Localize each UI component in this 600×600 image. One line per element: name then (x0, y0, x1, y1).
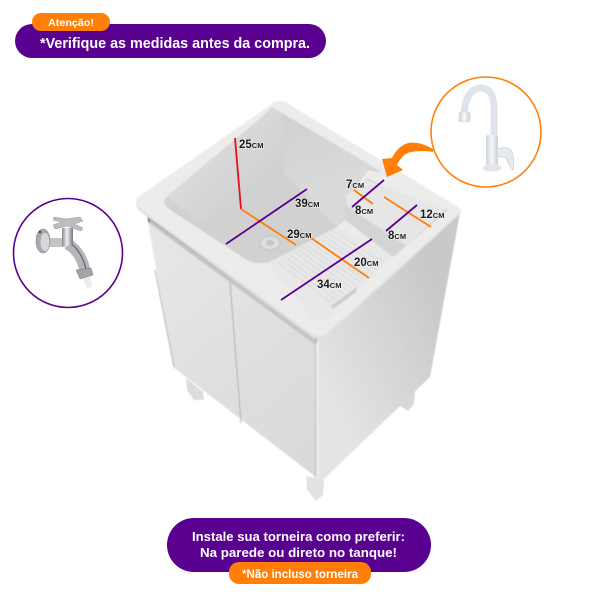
measurement labels: 8CM (388, 230, 406, 242)
tank rim lip (136, 198, 461, 339)
icon: chrome faucet (36, 217, 93, 288)
tank rim (136, 101, 460, 336)
badge: faucet not included: *Não incluso torneira (242, 569, 359, 581)
drain (260, 236, 280, 250)
circle: wall-mounted faucet (14, 198, 122, 308)
badge: faucet not included (229, 562, 371, 584)
line 39cm (226, 189, 307, 244)
measurement labels: 25CM (239, 139, 263, 151)
badge: Atenção: Atenção! (48, 17, 94, 29)
measurement labels: 8CM (355, 205, 373, 217)
back legs (186, 378, 415, 411)
soap dish (345, 178, 448, 257)
measurement labels: 39CM (295, 198, 319, 210)
circle: tank-mounted faucet (431, 77, 541, 187)
measurement labels: 29CM (287, 229, 311, 241)
line 7cm (354, 190, 373, 204)
line 34cm (281, 239, 372, 300)
measurement labels: 7CM (346, 179, 364, 191)
badge: Atenção (32, 13, 110, 31)
cabinet doors (148, 222, 318, 478)
top banner: check measurements (15, 13, 326, 58)
line 20cm (311, 238, 369, 278)
line 8cm upper (352, 180, 384, 207)
cabinet right side (316, 213, 460, 480)
measurement labels: 20CM (354, 257, 378, 269)
front leg (306, 476, 324, 501)
depth line 25cm (235, 138, 241, 209)
icon: white faucet (459, 88, 514, 172)
ribbed washboard (268, 227, 395, 323)
banner text: *Verifique as medidas antes da compra. (40, 36, 310, 52)
line 8cm lower (386, 205, 417, 231)
banner text: Instale sua torneira como preferir: (192, 530, 405, 544)
measurement labels: 34CM (317, 279, 341, 291)
measurement labels: 12CM (420, 209, 444, 221)
measurement labels (239, 139, 444, 291)
basin (164, 107, 383, 263)
banner text: Na parede ou direto no tanque! (200, 546, 397, 560)
arrow: from faucet to tank (382, 143, 433, 177)
dark gap under the tank (147, 214, 318, 345)
banner text (192, 530, 405, 560)
line 12cm (384, 197, 431, 227)
laundry tank cabinet (136, 101, 461, 501)
measurement lines (226, 138, 431, 300)
bottom banner: install your faucet (167, 518, 431, 584)
line 29cm (241, 209, 296, 245)
